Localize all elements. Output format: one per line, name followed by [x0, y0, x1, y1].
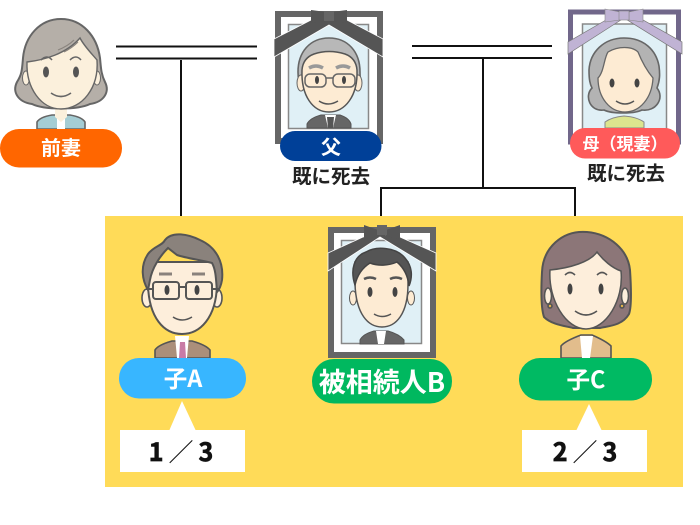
callout: child C share — [522, 404, 647, 472]
label: child A — [119, 358, 246, 398]
label: father: 父 — [321, 131, 341, 160]
icon: child C portrait — [541, 232, 631, 358]
icon: former wife portrait — [15, 19, 107, 129]
label: former wife — [0, 129, 122, 168]
text: father deceased: 既に死去 — [292, 160, 370, 189]
text: mother deceased: 既に死去 — [587, 157, 665, 186]
family tree connecting lines — [116, 46, 575, 216]
label: mother (current wife): 母（現妻） — [582, 130, 668, 155]
icon: father memorial portrait — [274, 10, 383, 141]
callout: child C share: 2／3 — [553, 433, 617, 469]
panel: heirs background — [105, 216, 683, 487]
label: former wife: 前妻 — [41, 132, 81, 161]
callout: child A share: 1／3 — [149, 433, 213, 469]
icon: mother memorial portrait — [568, 9, 682, 142]
label: father — [280, 131, 382, 161]
label: child A: 子A — [164, 360, 203, 394]
label: decedent B: 被相続人B — [319, 361, 445, 400]
label: child C: 子C — [567, 361, 605, 395]
label: child C — [519, 358, 652, 400]
icon: decedent B memorial portrait — [328, 225, 436, 355]
callout: child A share — [120, 401, 245, 472]
icon: child A portrait — [142, 234, 222, 358]
label: mother (current wife) — [570, 128, 680, 158]
